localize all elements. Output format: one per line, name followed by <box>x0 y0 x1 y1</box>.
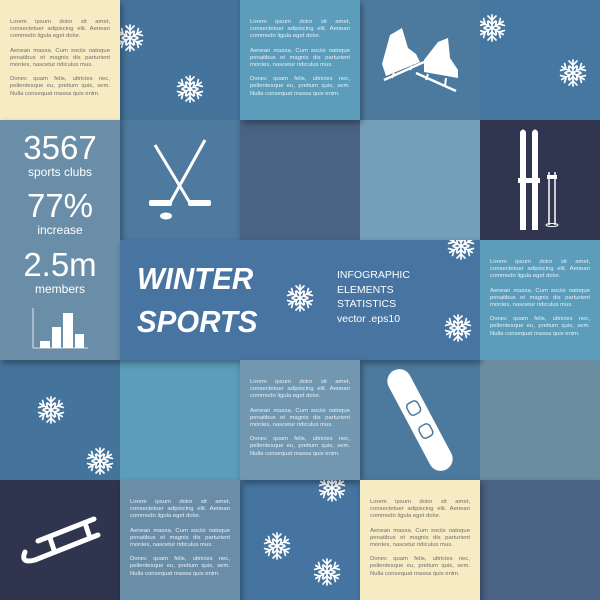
panel: snowflakes bottom <box>240 480 360 600</box>
panel: grey blue <box>480 360 600 480</box>
stat: members: 2.5m <box>23 246 97 283</box>
stat: increase: 77% <box>27 187 93 224</box>
text block: bottom: Donec quam felis, ultricies nec, pellentesque eu, pretium quis, sem. Nulla consequat massa quis enim. <box>130 556 230 577</box>
panel: dark <box>240 120 360 240</box>
text block: bottom cream: Lorem ipsum dolor sit amet, consectetuer adipiscing elit. Aenean commodo ligula eget dolor. <box>370 499 470 519</box>
text block: right middle: Aenean massa. Cum sociis natoque penatibus et magnis dis parturient montes, nascetur ridiculus mus. <box>490 288 590 308</box>
panel: snowboard <box>360 360 480 480</box>
stat: members: members <box>35 282 85 296</box>
panel: skates <box>360 0 480 120</box>
text block: top middle <box>240 0 360 120</box>
title panel <box>120 240 480 360</box>
text block: top middle: Donec quam felis, ultricies nec, pellentesque eu, pretium quis, sem. Nulla consequat massa quis enim. <box>250 76 350 97</box>
text block: top middle: Aenean massa. Cum sociis natoque penatibus et magnis dis parturient montes, nascetur ridiculus mus. <box>250 48 350 68</box>
subtitle: STATISTICS <box>337 298 396 310</box>
text block: center: Lorem ipsum dolor sit amet, consectetuer adipiscing elit. Aenean commodo ligula eget dolor. <box>250 379 350 399</box>
panel: stats <box>0 120 120 360</box>
text block: right middle: Donec quam felis, ultricies nec, pellentesque eu, pretium quis, sem. Nulla consequat massa quis enim. <box>490 316 590 337</box>
panel: sled <box>0 480 120 600</box>
text block: bottom: Lorem ipsum dolor sit amet, consectetuer adipiscing elit. Aenean commodo ligula eget dolor. <box>130 499 230 519</box>
subtitle: INFOGRAPHIC <box>337 269 410 281</box>
title: SPORTS <box>137 304 258 339</box>
text block: top left: Aenean massa. Cum sociis natoque penatibus et magnis dis parturient montes, nascetur ridiculus mus. <box>10 48 110 68</box>
panel: snowflakes top right <box>480 0 600 120</box>
panel: dark bottom right <box>480 480 600 600</box>
text block: top left <box>0 0 120 120</box>
text block: bottom cream: Aenean massa. Cum sociis natoque penatibus et magnis dis parturient montes, nascetur ridiculus mus. <box>370 528 470 548</box>
text block: bottom cream <box>360 480 480 600</box>
stat: increase: increase <box>37 223 83 237</box>
stat: clubs: sports clubs <box>28 165 92 179</box>
text block: bottom: Aenean massa. Cum sociis natoque penatibus et magnis dis parturient montes, nascetur ridiculus mus. <box>130 528 230 548</box>
text block: center <box>240 360 360 480</box>
text block: center: Aenean massa. Cum sociis natoque penatibus et magnis dis parturient montes, nascetur ridiculus mus. <box>250 408 350 428</box>
title <box>137 261 258 339</box>
panel: hockey <box>120 120 240 240</box>
stat: clubs: 3567 <box>23 129 97 166</box>
panel: snowflakes left <box>0 360 120 480</box>
text block: top middle: Lorem ipsum dolor sit amet, consectetuer adipiscing elit. Aenean commodo ligula eget dolor. <box>250 19 350 39</box>
text block: top left: Donec quam felis, ultricies nec, pellentesque eu, pretium quis, sem. Nulla consequat massa quis enim. <box>10 76 110 97</box>
text block: bottom cream: Donec quam felis, ultricies nec, pellentesque eu, pretium quis, sem. Nulla consequat massa quis enim. <box>370 556 470 577</box>
title: WINTER <box>137 261 253 296</box>
subtitle: vector .eps10 <box>337 312 400 324</box>
panel: skis <box>480 120 600 240</box>
text block: right middle <box>480 240 600 360</box>
subtitle <box>337 269 410 324</box>
panel: light <box>360 120 480 240</box>
panel: snowflakes top <box>120 0 240 120</box>
text block: top left: Lorem ipsum dolor sit amet, consectetuer adipiscing elit. Aenean commodo ligula eget dolor. <box>10 19 110 39</box>
text block: bottom <box>120 480 240 600</box>
text block: right middle: Lorem ipsum dolor sit amet, consectetuer adipiscing elit. Aenean commodo ligula eget dolor. <box>490 259 590 279</box>
snowflakes <box>286 240 474 342</box>
panel: turquoise <box>120 360 240 480</box>
subtitle: ELEMENTS <box>337 284 394 296</box>
chart: bars <box>32 308 88 348</box>
text block: center: Donec quam felis, ultricies nec, pellentesque eu, pretium quis, sem. Nulla consequat massa quis enim. <box>250 436 350 457</box>
